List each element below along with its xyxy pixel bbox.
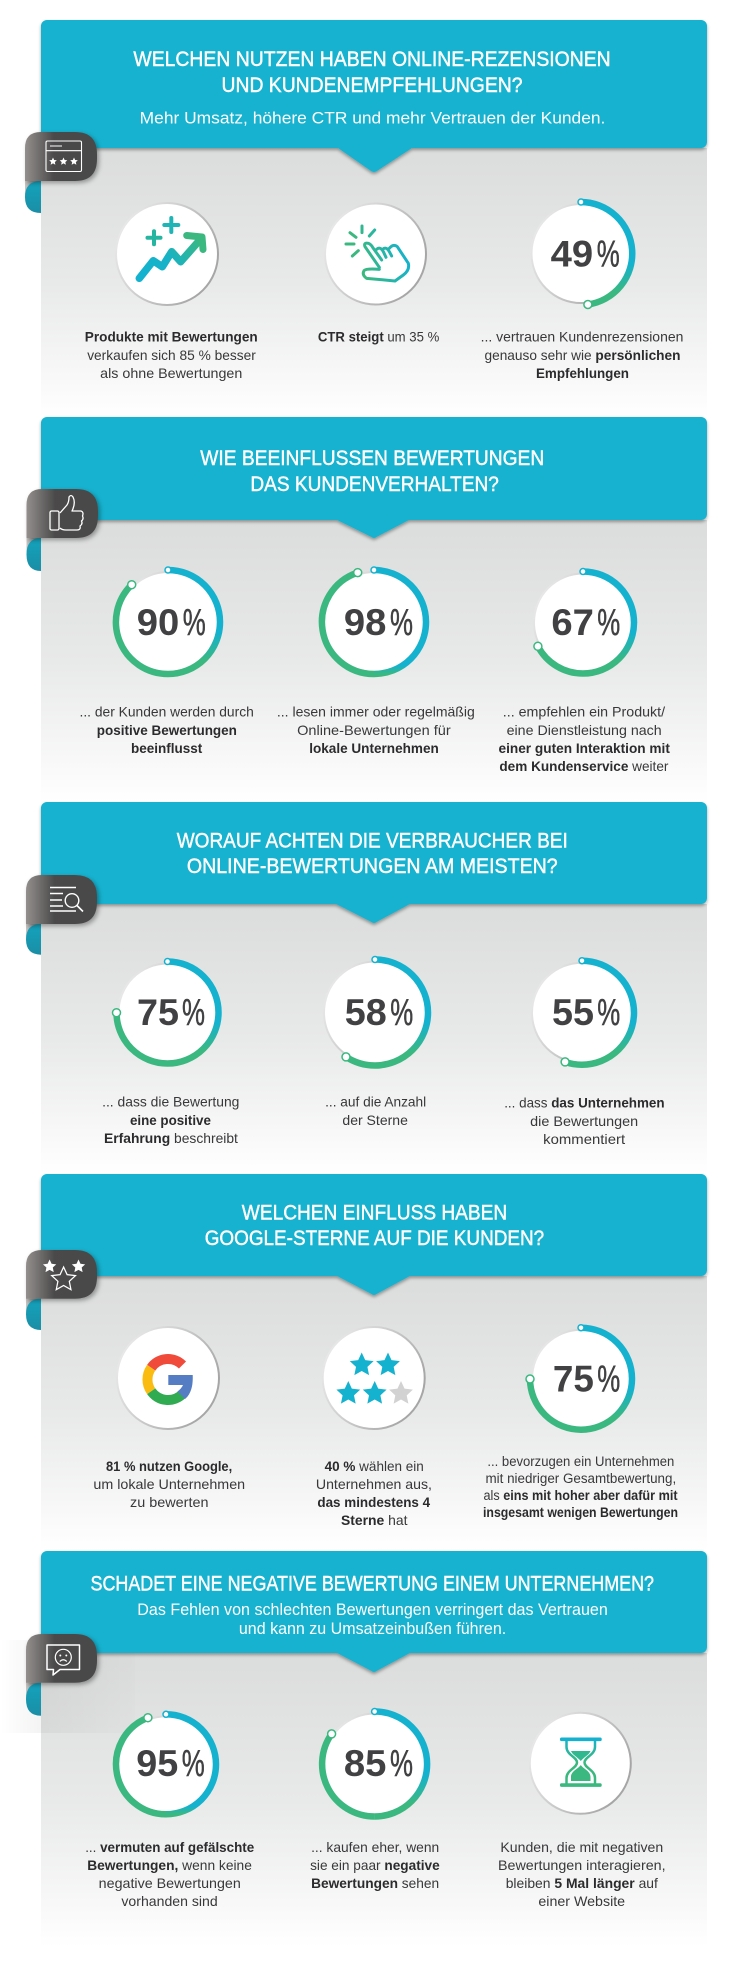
header: Worauf achten: ONLINE-BEWERTUNGEN AM MEISTEN? — [187, 855, 558, 878]
ring: 85 percent: 85 — [344, 1743, 386, 1784]
text: die Bewertungen: die Bewertungen — [530, 1113, 638, 1129]
header: Negative Bewertung: Das Fehlen von schlechten Bewertungen verringert das Vertrauen — [137, 1600, 608, 1619]
badge: sad speech bubble icon — [26, 1634, 97, 1716]
text: um lokale Unternehmen: um lokale Unternehmen — [93, 1476, 245, 1492]
ring: 75 percent Google: % — [597, 1359, 620, 1400]
icon: hourglass — [530, 1713, 631, 1814]
icon: growth arrow — [116, 203, 218, 305]
ring: 98 percent: % — [390, 602, 413, 643]
header: Google-Sterne: WELCHEN EINFLUSS HABEN — [242, 1201, 507, 1224]
header: Nutzen: UND KUNDENEMPFEHLUNGEN? — [222, 74, 522, 97]
panel: Worauf achten — [26, 802, 707, 1174]
ring: 75 percent: % — [182, 992, 205, 1033]
text: mit niedriger: mit niedriger Gesamtbewertung, — [486, 1471, 676, 1486]
ring: 49 percent: 49 — [551, 234, 593, 275]
ring: 95 percent — [116, 1711, 216, 1814]
ring: 85 percent — [322, 1708, 427, 1816]
text: der Kunden: ... der Kunden werden durch — [80, 704, 254, 720]
text: 81 % nutzen Google: 81 % nutzen Google, — [106, 1458, 232, 1474]
text: Bewertungen wenn keine: Bewertungen, wenn keine — [87, 1857, 252, 1873]
text: dass die Bewertung: ... dass die Bewertung — [102, 1094, 239, 1110]
header: Google-Sterne: GOOGLE-STERNE AUF DIE KUNDEN? — [205, 1227, 544, 1250]
ring: 55 percent: 55 — [552, 992, 594, 1033]
ring: 67 percent — [534, 568, 634, 674]
text: genauso: genauso sehr wie persönlichen — [484, 347, 680, 363]
text: vertrauen: ... vertrauen Kundenrezensionen — [481, 329, 683, 345]
ring: 58 percent: 58 — [345, 992, 387, 1033]
panel: Kundenverhalten — [26, 417, 707, 802]
ring: 49 percent — [532, 199, 632, 308]
ring: 98 percent: 98 — [344, 602, 386, 643]
text: dem Kundenservice: dem Kundenservice weiter — [499, 758, 669, 774]
text: einer guten: einer guten Interaktion mit — [498, 740, 670, 756]
text: Bewertungen sehen: Bewertungen sehen — [311, 1875, 439, 1891]
panel: Google-Sterne — [26, 1174, 707, 1551]
text: lokale Unternehmen: lokale Unternehmen — [309, 740, 439, 756]
ring: 75 percent: 75 — [137, 992, 179, 1033]
text: Kunden die mit: Kunden, die mit negativen — [500, 1839, 663, 1855]
ring: 98 percent — [322, 567, 426, 674]
ring: 75 percent — [112, 958, 219, 1064]
text: lesen immer: ... lesen immer oder regelmäßig — [277, 704, 475, 720]
ring: 75 percent Google — [526, 1325, 632, 1430]
header: Negative Bewertung: SCHADET EINE NEGATIVE BEWERTUNG EINEM UNTERNEHMEN? — [90, 1573, 654, 1596]
text: vorhanden sind: vorhanden sind — [121, 1893, 218, 1909]
badge: thumbs up icon — [26, 489, 98, 571]
header: Kundenverhalten: DAS KUNDENVERHALTEN? — [250, 473, 499, 496]
text: kaufen eher: ... kaufen eher, wenn — [311, 1839, 439, 1855]
text: Sterne hat: Sterne hat — [341, 1512, 408, 1528]
text: Produkte: Produkte mit Bewertungen — [85, 329, 258, 345]
header: Nutzen: Mehr Umsatz, höhere CTR und mehr Vertrauen der Kunden. — [140, 108, 605, 127]
header: Kundenverhalten — [41, 417, 707, 538]
text: CTR: CTR steigt um 35 % — [318, 329, 439, 345]
text: einer Website: einer Website — [538, 1893, 625, 1909]
icon: star rating — [323, 1327, 425, 1429]
text: Erfahrung: Erfahrung beschreibt — [104, 1130, 238, 1146]
header: Worauf achten — [41, 802, 707, 923]
ring: 55 percent: % — [597, 992, 620, 1033]
header: Negative Bewertung — [41, 1551, 707, 1672]
text: sie ein paar: sie ein paar negative — [310, 1857, 440, 1873]
ring: 90 percent: 90 — [137, 602, 179, 643]
text: vermuten: ... vermuten auf gefälschte — [85, 1839, 254, 1855]
text: Bewertungen interagieren: Bewertungen interagieren, — [498, 1857, 666, 1873]
text: dass das Unternehmen: ... dass das Unternehmen — [504, 1095, 665, 1111]
text: eine positive: eine positive — [130, 1112, 211, 1128]
text: negative Bewertungen: negative Bewertungen — [99, 1875, 241, 1891]
header: Nutzen: WELCHEN NUTZEN HABEN ONLINE-REZENSIONEN — [133, 48, 611, 71]
text: auf die Anzahl: ... auf die Anzahl — [325, 1094, 426, 1110]
ring: 95 percent: % — [182, 1743, 205, 1784]
text: empfehlen: ... empfehlen ein Produkt/ — [503, 704, 665, 720]
text: der Sterne: der Sterne — [342, 1112, 408, 1128]
badge: stars icon — [26, 1250, 97, 1330]
ring: 67 percent: 67 — [551, 602, 594, 643]
text: Online-Bewertungen: Online-Bewertungen für — [297, 722, 451, 738]
ring: 95 percent: 95 — [136, 1743, 178, 1784]
text: das mindestens 4: das mindestens 4 — [317, 1494, 430, 1510]
badge shadow block — [0, 1640, 135, 1733]
text: bleiben 5 Mal: bleiben 5 Mal länger auf — [506, 1875, 658, 1891]
ring: 49 percent: % — [597, 234, 620, 275]
badge: search list icon — [26, 875, 97, 955]
text: eine Dienstleistung: eine Dienstleistung nach — [507, 722, 662, 738]
header: Worauf achten: WORAUF ACHTEN DIE VERBRAUCHER BEI — [177, 829, 568, 852]
ring: 75 percent Google: 75 — [553, 1359, 594, 1400]
ring: 55 percent — [532, 958, 634, 1066]
text: insgesamt: insgesamt wenigen Bewertungen — [483, 1505, 678, 1520]
text: bevorzugen: ... bevorzugen ein Unternehmen — [487, 1454, 674, 1469]
text: Empfehlungen: Empfehlungen — [536, 365, 629, 381]
text: als eins: als eins mit hoher aber dafür mit — [484, 1488, 678, 1503]
text: als ohne: als ohne Bewertungen — [100, 365, 242, 381]
panel: Negative Bewertung — [0, 1551, 707, 1947]
text: kommentiert: kommentiert — [543, 1131, 625, 1147]
ring: 67 percent: % — [597, 602, 620, 643]
text: verkaufen: verkaufen sich 85 % besser — [87, 347, 256, 363]
text: positive Bewertungen: positive Bewertungen — [97, 722, 237, 738]
badge: browser rating icon — [25, 132, 97, 213]
icon: Google G — [117, 1327, 219, 1429]
header: Negative Bewertung: und kann zu Umsatzeinbußen führen. — [239, 1619, 506, 1638]
icon: clicking hand — [325, 204, 426, 304]
ring: 85 percent: % — [390, 1743, 413, 1784]
ring: 90 percent — [116, 567, 220, 674]
ring: 58 percent — [324, 956, 428, 1066]
ring: 90 percent: % — [183, 602, 206, 643]
text: Unternehmen aus: Unternehmen aus, — [316, 1476, 432, 1492]
header: Kundenverhalten: WIE BEEINFLUSSEN BEWERTUNGEN — [200, 447, 544, 470]
text: beeinflusst: beeinflusst — [131, 740, 203, 756]
ring: 58 percent: % — [390, 992, 413, 1033]
panel: Nutzen — [25, 20, 707, 417]
header: Nutzen — [41, 20, 707, 172]
header: Google-Sterne — [41, 1174, 707, 1295]
text: 40 %: 40 % wählen ein — [325, 1458, 424, 1474]
text: zu bewerten: zu bewerten — [130, 1494, 208, 1510]
